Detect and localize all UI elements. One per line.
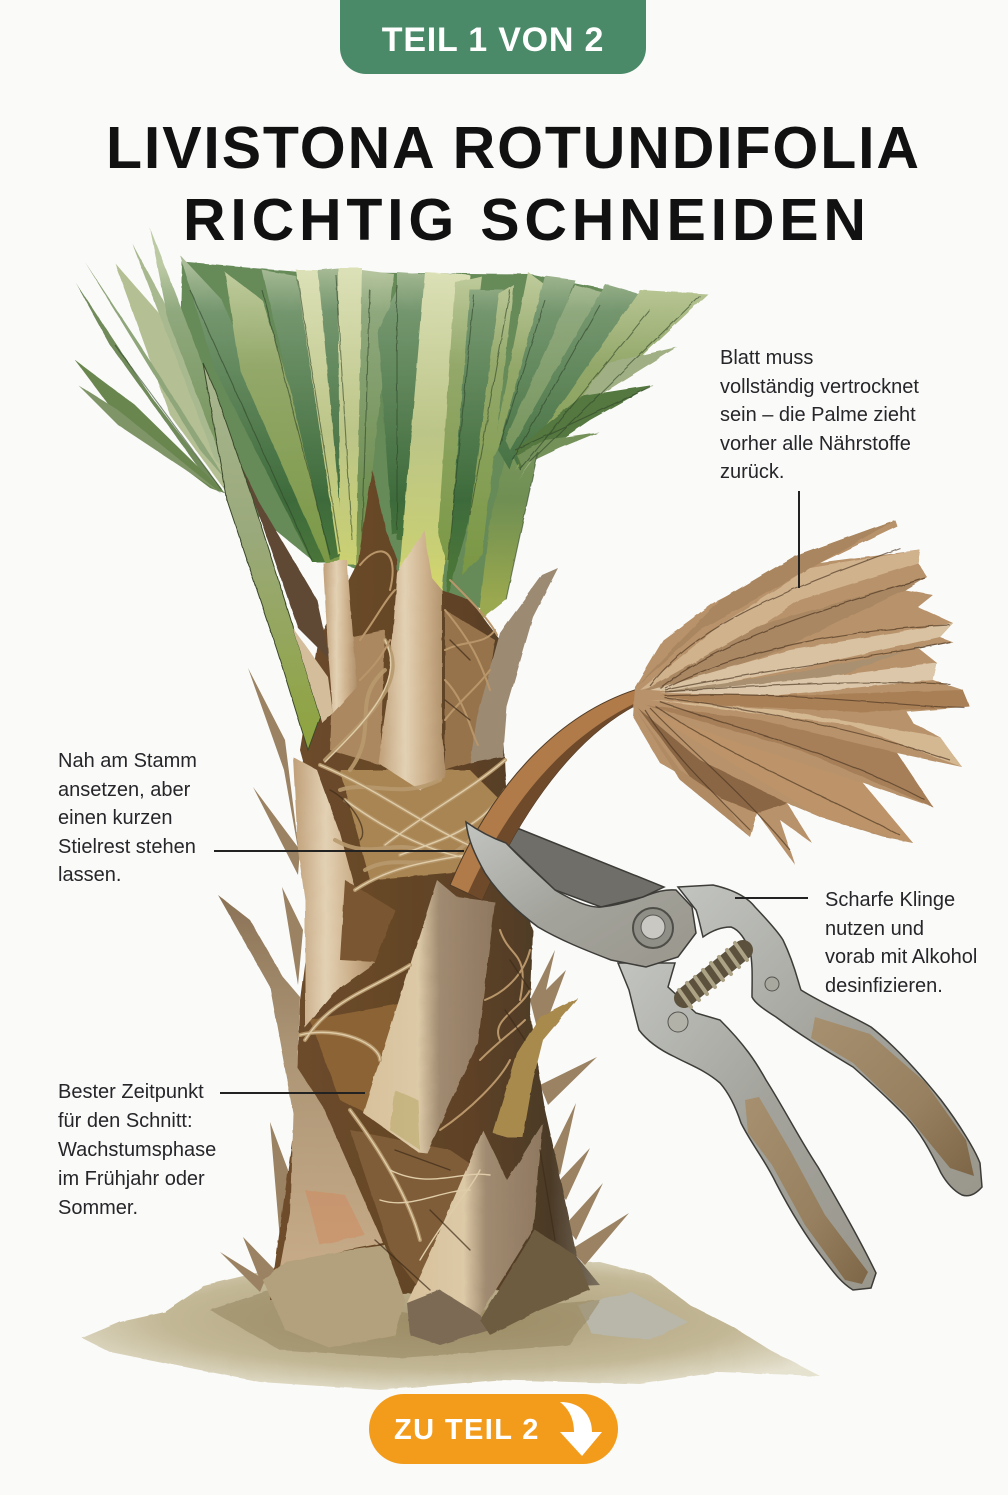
callout: best time: Wachstumsphase xyxy=(58,1139,216,1161)
callout: sharp blade: Scharfe Klinge xyxy=(825,889,955,911)
stub: centre lower xyxy=(363,880,495,1153)
stub: centre top xyxy=(378,530,446,790)
shear blade xyxy=(466,822,696,967)
callout: frond dryness xyxy=(720,347,919,483)
callout: best time: im Frühjahr oder xyxy=(58,1168,205,1190)
stub: long left xyxy=(293,757,375,1028)
callout: sharp blade: nutzen und xyxy=(825,918,924,940)
trunk fibres xyxy=(300,551,555,1290)
palm crown: green fan xyxy=(75,228,708,622)
leader line: frond xyxy=(798,491,800,588)
leaf stubs on trunk xyxy=(218,530,590,1348)
title: LIVISTONA ROTUNDIFOLIA xyxy=(106,115,919,181)
callout: cut position: ansetzen, aber xyxy=(58,779,190,801)
callout: frond dryness: zurück. xyxy=(720,461,784,483)
palm trunk core xyxy=(203,363,600,1300)
dead frond xyxy=(450,520,970,900)
upper grip xyxy=(811,1017,974,1176)
pruning shears xyxy=(466,822,982,1290)
callout: cut position: lassen. xyxy=(58,864,121,886)
callout: sharp blade xyxy=(825,889,977,997)
callout: frond dryness: vollständig vertrocknet xyxy=(720,376,919,398)
stub: small left xyxy=(323,560,357,713)
title xyxy=(106,115,919,253)
callout: sharp blade: desinfizieren. xyxy=(825,975,943,997)
button: to part 2 xyxy=(369,1394,618,1464)
button label: ZU TEIL 2 xyxy=(394,1414,540,1446)
upper rivet xyxy=(765,977,779,991)
root lumps xyxy=(263,1245,405,1348)
callout: best time: für den Schnitt: xyxy=(58,1110,193,1132)
shear pivot xyxy=(633,908,673,948)
shear upper handle xyxy=(678,885,982,1196)
callout: frond dryness: vorher alle Nährstoffe xyxy=(720,433,911,455)
frond blades xyxy=(633,520,970,865)
callout: frond dryness: sein – die Palme zieht xyxy=(720,404,916,426)
lower rivet xyxy=(668,1012,688,1032)
title: RICHTIG SCHNEIDEN xyxy=(183,187,866,253)
leader line: cut position xyxy=(214,850,464,852)
pruner: upper dark jaw xyxy=(506,828,664,907)
callout: cut position: einen kurzen xyxy=(58,807,173,829)
badge: part 1 of 2: TEIL 1 VON 2 xyxy=(382,21,604,59)
frond stem xyxy=(450,682,668,900)
callout: cut position: Nah am Stamm xyxy=(58,750,197,772)
callout: best time: Sommer. xyxy=(58,1197,138,1219)
trunk spikes xyxy=(220,668,629,1292)
leader line: best time xyxy=(220,1092,365,1094)
leader line: blade xyxy=(735,897,808,899)
stub: yellow right xyxy=(493,998,578,1137)
callout: best time: Bester Zeitpunkt xyxy=(58,1081,204,1103)
badge: part 1 of 2 xyxy=(340,0,646,74)
stub: bottom left xyxy=(218,895,383,1267)
callout: sharp blade: vorab mit Alkohol xyxy=(825,946,977,968)
callout: cut position: Stielrest stehen xyxy=(58,836,196,858)
callout: cut position xyxy=(58,750,197,886)
stub: bottom right xyxy=(407,1123,543,1320)
icon: curved down arrow xyxy=(560,1402,602,1456)
shear spring xyxy=(679,943,747,1007)
fan backing xyxy=(180,262,660,610)
stub: grey right xyxy=(470,568,558,763)
callout: best time xyxy=(58,1081,216,1219)
callout: frond dryness: Blatt muss xyxy=(720,347,813,369)
stub: small triangle xyxy=(293,628,333,723)
lower grip xyxy=(745,1097,868,1284)
shear lower handle xyxy=(618,963,876,1290)
ground soil xyxy=(82,1262,820,1390)
